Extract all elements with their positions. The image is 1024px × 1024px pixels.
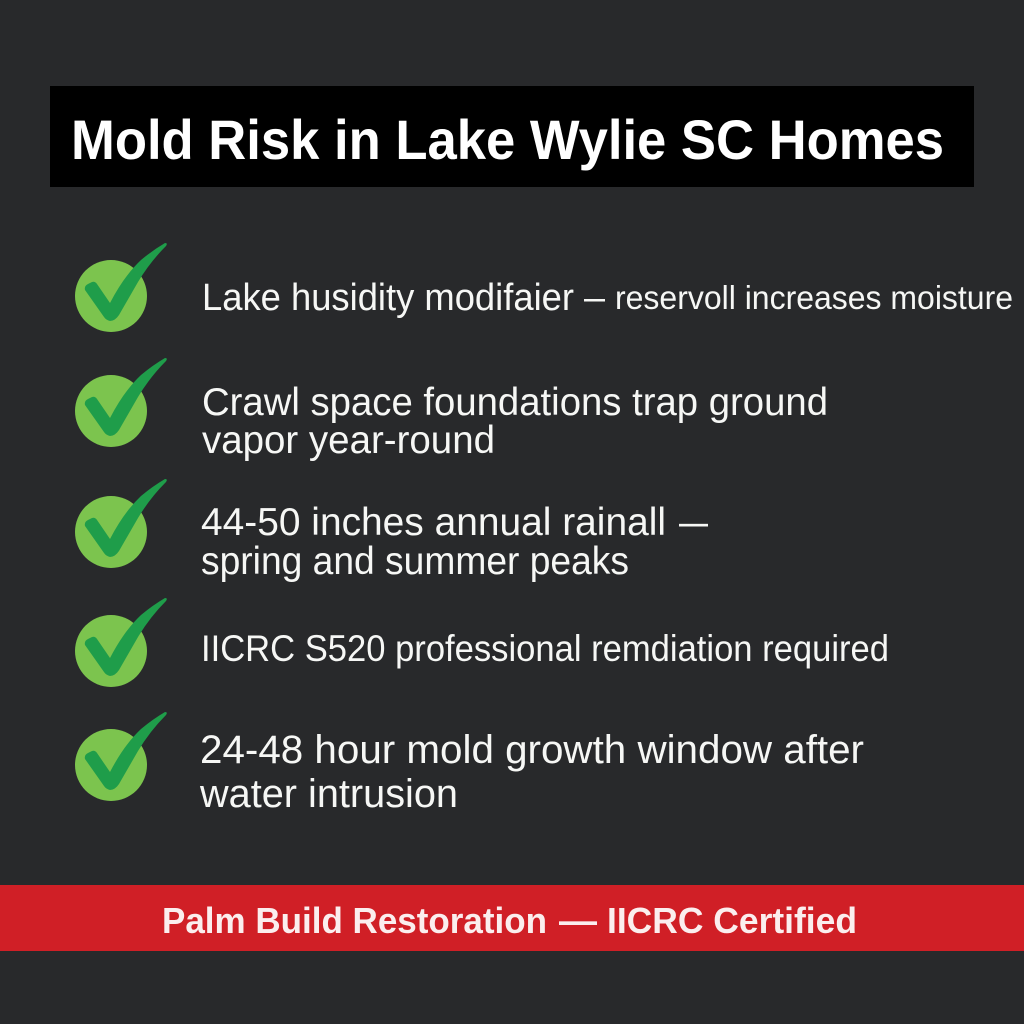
text: lake humidity modifier: —: [584, 277, 605, 319]
list item 3: annual rainfall: [75, 479, 708, 583]
text: mold growth window: [199, 728, 864, 816]
text: crawl space foundations: Crawl space foundations trap ground: [202, 381, 828, 424]
footer text: Palm Build Restoration: [162, 900, 547, 941]
list item 1: lake humidity: [75, 243, 1013, 332]
text: crawl space foundations: [202, 381, 828, 462]
text: annual rainfall: —: [679, 501, 708, 544]
text: mold growth window: 24-48 hour mold growth window after: [200, 728, 864, 772]
icon: green check 2: [75, 358, 167, 447]
text: annual rainfall: [201, 501, 708, 583]
title banner: [50, 86, 974, 187]
text: lake humidity modifier: Lake husidity modifaier: [202, 277, 574, 319]
title text: Mold Risk in Lake Wylie SC Homes: [71, 108, 944, 171]
text: mold growth window: water intrusion: [199, 772, 458, 816]
list item 5: growth window: [75, 712, 864, 816]
text: lake humidity modifier: reservoll increases moisture: [615, 279, 1013, 316]
footer text: —: [559, 900, 597, 941]
text: professional remediation: IICRC S520 professional remdiation required: [201, 628, 889, 669]
list item 4: IICRC S520: [75, 598, 889, 687]
list item 2: crawl space: [75, 358, 828, 462]
footer banner: [0, 885, 1024, 951]
icon: green check 5: [75, 712, 167, 801]
icon: green check 1: [75, 243, 167, 332]
text: lake humidity modifier: [202, 277, 1013, 319]
icon: green check 4: [75, 598, 167, 687]
text: annual rainfall: 44-50 inches annual rainall: [201, 501, 666, 544]
icon: green check 3: [75, 479, 167, 568]
footer text: [162, 900, 857, 941]
text: crawl space foundations: vapor year-round: [202, 419, 495, 462]
footer text: IICRC Certified: [607, 900, 857, 941]
text: annual rainfall: spring and summer peaks: [201, 540, 629, 583]
